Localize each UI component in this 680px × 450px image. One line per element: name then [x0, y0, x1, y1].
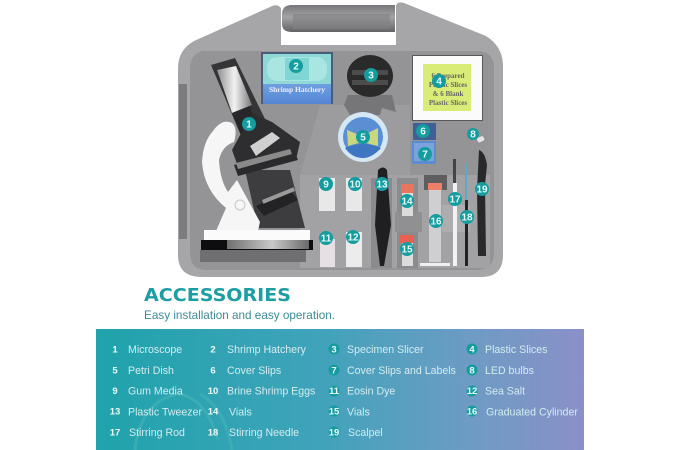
- microscope base: [204, 230, 310, 240]
- list labels: Vials: [229, 406, 252, 418]
- marker 14: [400, 194, 414, 208]
- microscope arm and stand: [202, 122, 260, 231]
- list numbers: 10: [208, 386, 218, 397]
- plastic slices box: & 6 Blank: [433, 90, 463, 98]
- list numbers: 3: [331, 344, 337, 356]
- marker 12: [346, 230, 360, 244]
- plastic slices box: [412, 55, 483, 121]
- plastic tweezer: [375, 168, 391, 266]
- list labels: LED bulbs: [485, 365, 534, 377]
- list labels: Brine Shrimp Eggs: [227, 386, 315, 398]
- marker 8: 8: [470, 130, 476, 140]
- list labels: Sea Salt: [485, 386, 525, 398]
- plastic slices box: Plastic Slices: [429, 81, 467, 89]
- marker 11: 11: [321, 234, 332, 244]
- list numbers: 13: [110, 406, 120, 418]
- list labels: Gum Media: [128, 386, 183, 398]
- panel: accessories list: [96, 329, 584, 450]
- subheading: Easy installation and easy operation.: [144, 308, 335, 322]
- marker 7: 7: [422, 150, 428, 160]
- list numbers: 1: [112, 344, 118, 356]
- list numbers: 14: [208, 406, 219, 418]
- list labels: Specimen Slicer: [347, 344, 424, 356]
- marker 13: [375, 177, 389, 191]
- stirring rod: [453, 159, 457, 266]
- list numbers: 9: [112, 386, 118, 397]
- marker 8: [467, 128, 479, 140]
- marker 14: 14: [401, 196, 413, 208]
- list labels: Cover Slips and Labels: [347, 365, 456, 377]
- marker 13: 13: [376, 180, 388, 190]
- case inner tray: [190, 51, 494, 270]
- marker 3: [364, 68, 378, 82]
- moulded slots: [371, 178, 418, 268]
- marker 17: 17: [449, 194, 461, 206]
- marker 6: [416, 124, 430, 138]
- marker 6: 6: [420, 126, 426, 138]
- list labels: Eosin Dye: [347, 386, 395, 398]
- dark background behind focus block: [245, 170, 305, 228]
- list labels: Stirring Needle: [229, 427, 299, 439]
- marker 4: 4: [436, 76, 442, 88]
- marker 16: [429, 214, 443, 228]
- marker 18: 18: [461, 212, 473, 224]
- marker 15: 15: [401, 244, 413, 256]
- list labels: Shrimp Hatchery: [227, 344, 307, 356]
- list labels: Cover Slips: [227, 365, 281, 377]
- scalpel: [477, 150, 487, 256]
- list numbers: [110, 344, 478, 438]
- marker 17: [448, 192, 462, 206]
- plastic slices box: 6 Prepared: [432, 72, 465, 80]
- marker 2: 2: [293, 62, 299, 72]
- list labels: Graduated Cylinder: [486, 406, 578, 418]
- list labels: Stirring Rod: [129, 427, 185, 439]
- list numbers: 19: [329, 428, 339, 438]
- list labels: Plastic Slices: [485, 344, 547, 356]
- marker 1: [242, 117, 256, 131]
- vials: [400, 184, 414, 266]
- marker 9: 9: [323, 180, 329, 190]
- marker 10: [348, 177, 362, 191]
- list labels: [128, 344, 578, 439]
- list numbers: 4: [469, 344, 475, 356]
- petri dish: [338, 112, 388, 162]
- specimen slicer: [344, 55, 396, 115]
- marker 11: [319, 231, 333, 245]
- case shell: [178, 2, 503, 277]
- cover slip boxes: [412, 123, 436, 164]
- list numbers: 11: [329, 386, 340, 397]
- shrimp hatchery box: [261, 52, 333, 104]
- marker 3: 3: [368, 70, 374, 82]
- marker 10: 10: [349, 180, 361, 190]
- list numbers: 8: [469, 366, 475, 376]
- list numbers: 2: [210, 344, 216, 356]
- list numbers: 15: [329, 406, 340, 418]
- graduated cylinder: [420, 183, 450, 266]
- marker 12: 12: [347, 232, 359, 244]
- case handle: [282, 5, 397, 45]
- marker 16: 16: [430, 216, 442, 228]
- list numbers: 17: [110, 428, 120, 438]
- marker 19: 19: [476, 184, 488, 196]
- marker 1: 1: [246, 120, 252, 130]
- list labels: Plastic Tweezer: [128, 406, 202, 418]
- tray lighter moulding: [300, 105, 410, 175]
- microscope: [201, 58, 313, 250]
- small bottles: [319, 178, 362, 267]
- plastic slices box: Plastic Slices: [429, 99, 467, 107]
- shrimp hatchery box: Shrimp Hatchery: [269, 85, 325, 94]
- marker 18: [460, 210, 474, 224]
- list numbers: 12: [467, 386, 477, 397]
- marker 7: [418, 147, 432, 161]
- marker 19: [475, 182, 489, 196]
- list numbers: 6: [210, 366, 216, 376]
- list numbers: 7: [331, 366, 337, 376]
- list labels: Petri Dish: [128, 365, 174, 377]
- marker 2: [289, 59, 303, 73]
- marker 9: [319, 177, 333, 191]
- list numbers: 18: [208, 428, 218, 438]
- decorative ring: [135, 394, 232, 450]
- stirring needle: [465, 163, 468, 266]
- list labels: Microscope: [128, 344, 182, 356]
- list numbers: 16: [467, 406, 477, 418]
- item markers: [242, 59, 489, 256]
- led bulb: [476, 135, 485, 143]
- marker 5: [356, 130, 370, 144]
- list labels: Vials: [347, 406, 370, 418]
- marker 15: [400, 242, 414, 256]
- marker 4: [432, 74, 446, 88]
- list numbers: 5: [112, 366, 118, 376]
- marker 5: 5: [360, 132, 366, 144]
- carrying case: [178, 2, 503, 277]
- list labels: Scalpel: [348, 427, 383, 439]
- heading: ACCESSORIES: [144, 286, 291, 306]
